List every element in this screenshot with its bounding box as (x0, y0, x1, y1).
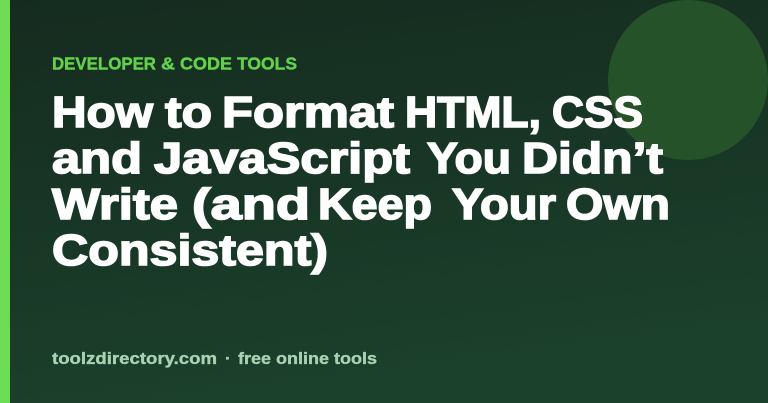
category label: & (161, 54, 175, 74)
title (52, 88, 670, 275)
title: CSS (552, 88, 643, 137)
footer text (52, 349, 377, 368)
decorative circle (608, 0, 768, 160)
title: Consistent) (52, 226, 328, 275)
title: (and (192, 180, 310, 229)
title: Keep (318, 180, 432, 229)
left accent bar (0, 0, 10, 403)
title: You (427, 134, 511, 183)
category label (52, 54, 297, 74)
title: to (165, 88, 212, 137)
title: HTML, (405, 88, 541, 137)
footer text: free online tools (238, 349, 377, 368)
footer text: toolzdirectory.com (52, 349, 217, 368)
category label: CODE (180, 54, 232, 74)
title: JavaScript (154, 134, 410, 183)
title: Your (452, 180, 556, 229)
category label: DEVELOPER (52, 54, 156, 74)
category label: TOOLS (237, 54, 297, 74)
title: and (52, 134, 142, 183)
footer text: · (225, 349, 231, 368)
title: Write (52, 180, 178, 229)
title: Didn’t (522, 134, 663, 183)
title: Format (222, 88, 394, 137)
title: How (52, 88, 154, 137)
title: Own (566, 180, 670, 229)
